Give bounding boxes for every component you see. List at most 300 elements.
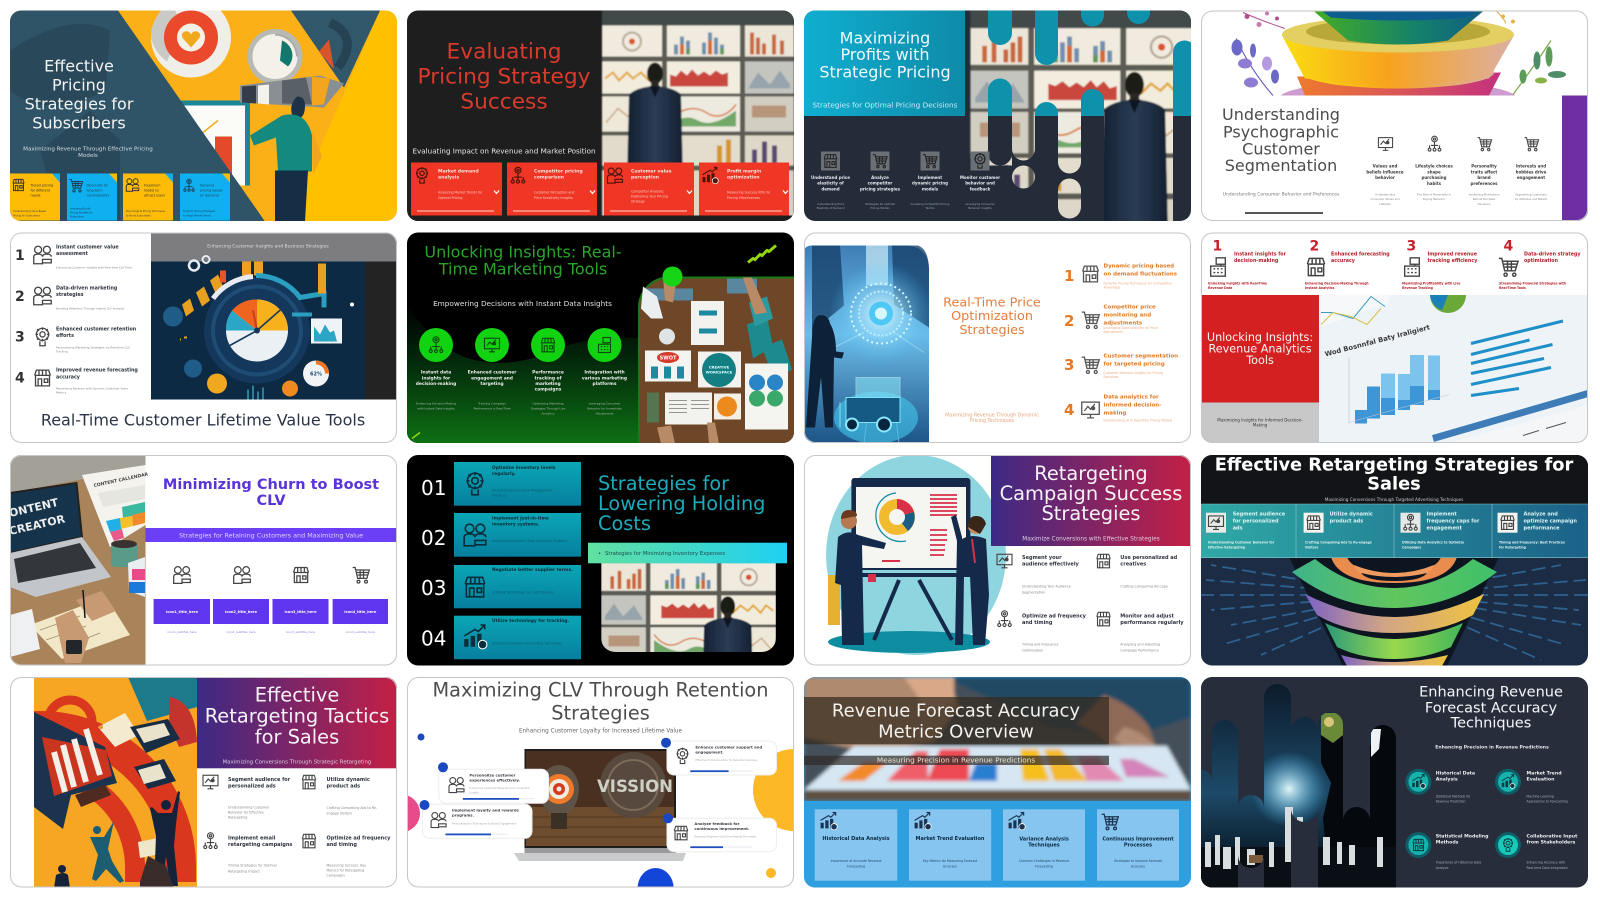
- list item 3: [1064, 354, 1178, 379]
- callout: feedback: [663, 813, 776, 852]
- title band: Campaign Success: [1000, 482, 1182, 505]
- list item 4: Implementing AI in Real-Time Pricing Models: [1104, 418, 1173, 422]
- item: personalized creatives: creatives: [1120, 562, 1146, 568]
- item: analyze performance: [1498, 512, 1577, 550]
- item: market trend: Approaches to Forecasting: [1526, 800, 1568, 804]
- list item 2: Adjustments: [1104, 330, 1123, 334]
- item: historical data: Historical Data: [1436, 770, 1475, 776]
- step 01: Optimize inventory levels: [492, 465, 556, 471]
- title box: Tools: [1245, 354, 1274, 367]
- item: segment audience: ads: [1233, 525, 1243, 531]
- item: lifestyle choices: shape: [1427, 170, 1441, 174]
- item: frequency caps: frequency caps for: [1426, 518, 1480, 524]
- list item 1: [1208, 238, 1287, 290]
- item: ad frequency: Optimize ad frequency: [326, 835, 391, 841]
- card: continuous improvement: Accuracy: [1131, 864, 1145, 868]
- item: integration: [582, 328, 627, 416]
- item: ad frequency: [302, 834, 391, 878]
- title: Optimization: [951, 309, 1033, 324]
- list item 4: making: [1104, 410, 1126, 416]
- item: interests and hobbies: Segmenting Customers: [1515, 192, 1547, 196]
- panel: Revenue Forecast Accuracy Metrics Overview: [804, 677, 1191, 888]
- item: dynamic ads: [302, 775, 378, 815]
- illustration: telescope: [240, 76, 344, 108]
- card: tiered pricing: Pricing for Subscribers: [13, 214, 41, 218]
- list item 2: adjustments: [1104, 320, 1143, 326]
- item: frequency caps: [1400, 512, 1480, 550]
- title: Segmentation: [1225, 156, 1337, 175]
- card: market demand: Optimal Pricing: [438, 196, 462, 200]
- list item 3: tracking efficiency: [1428, 258, 1478, 264]
- photo: workspace table: WORKSPACE: [706, 370, 733, 374]
- list item 3: Improved revenue: [1428, 252, 1478, 258]
- item: instant data insights: Instant data: [421, 370, 451, 376]
- panel: Minimizing Churn to Boost CLV: [8, 455, 397, 666]
- photo: hands over colourful chart: [804, 677, 1191, 801]
- title band: Revenue Forecast Accuracy: [832, 701, 1080, 722]
- icon: zigzag accent: [748, 246, 776, 262]
- item: segment audience: Effective Retargeting: [1208, 546, 1245, 550]
- callout: feedback: Analyze feedback for: [694, 821, 740, 826]
- item: implement dynamic pricing: dynamic pricing: [912, 180, 948, 186]
- list item 3: Customer segmentation: [1104, 354, 1178, 360]
- item: monitor performance: [1097, 612, 1184, 653]
- title box: Revenue Analytics: [1208, 342, 1312, 356]
- list item 2: accuracy: [1331, 258, 1356, 264]
- list item 1: [15, 244, 132, 270]
- photo: chart wall with man: [969, 10, 1191, 221]
- card: tiered pricing: Tiered pricing: [30, 184, 53, 188]
- card: profit margin: Measuring Success KPIs for: [727, 190, 771, 194]
- item: values and beliefs: behavior: [1375, 175, 1395, 180]
- list item 4: 4: [1064, 401, 1074, 419]
- item: segment: Understanding Your Audience: [1022, 585, 1071, 589]
- callout: customer support: [661, 738, 776, 775]
- item: segment audience: Segment audience: [1233, 512, 1286, 518]
- item: values and beliefs: Understanding: [1375, 192, 1395, 196]
- card: competitor pricing: Competitor pricing: [534, 168, 583, 174]
- card: customer value: Customer value: [631, 168, 672, 174]
- item: analyze competitor pricing: competitor: [868, 180, 892, 186]
- item: understand price elasticity: demand: [821, 186, 840, 192]
- item: implement dynamic pricing: [911, 152, 950, 210]
- title band: [804, 697, 1109, 744]
- item: interests and hobbies: [1515, 138, 1548, 201]
- item: integration: various marketing: [582, 376, 627, 382]
- item: understand price elasticity: elasticity of: [817, 180, 844, 186]
- subtitle: Empowering Decisions with Instant Data Insights: [433, 299, 612, 308]
- item: values and beliefs: [1366, 138, 1404, 206]
- list item 3: efforts: [56, 333, 74, 339]
- item 1: icon1_subtitle_here: [167, 630, 197, 634]
- item: segment audience: Behavior for Effective: [228, 810, 264, 814]
- list item 3: Customer Behavior Insights for Pricing: [1104, 371, 1163, 375]
- card: continuous improvement: Continuous Improvement: [1102, 837, 1174, 843]
- card: market trend: Market Trend Evaluation: [916, 836, 985, 842]
- list item 2: 2: [15, 289, 25, 305]
- list item 2: Boosting Retention Through Instant CLV Analysis: [56, 306, 125, 310]
- illustration: laptop with vision sign: [514, 749, 686, 861]
- item: monitor customer behavior: Behavior Insights: [968, 206, 992, 210]
- item: segment audience: for personalized: [1233, 518, 1279, 524]
- panel: Retargeting Campaign Success Strategies: [804, 455, 1191, 666]
- title band: Retargeting: [1034, 462, 1148, 485]
- list item 2: [15, 286, 125, 310]
- item 4: icon4_subtitle_here: [346, 630, 375, 634]
- item: integration: Integration with: [584, 370, 625, 376]
- subtitle band: Measuring Precision in Revenue Predictions: [877, 756, 1035, 765]
- item: implement dynamic pricing: Tactics: [924, 206, 935, 210]
- card: discounts: commitments: [86, 194, 110, 198]
- panel: Real-Time Price Optimization Strategies: [804, 232, 1191, 444]
- item: personalized creatives: Use personalized ad: [1120, 555, 1178, 561]
- title: Strategic Pricing: [819, 62, 951, 82]
- item: segment: [997, 554, 1080, 594]
- step 03: Negotiate better supplier terms.: [492, 567, 573, 573]
- background green wave: [407, 304, 647, 444]
- item: instant data insights: with Instant Data Insights: [417, 406, 455, 410]
- card: dynamic pricing: pricing based: [200, 188, 222, 192]
- callout: customer support: Effective Communication for Retention Success: [695, 758, 758, 762]
- item: market trend: Evaluation: [1526, 776, 1554, 782]
- item: personality traits: preferences: [1470, 181, 1498, 186]
- panel: Effective Retargeting Tactics for Sales: [0, 677, 397, 888]
- list item 1: Dynamic pricing based: [1104, 264, 1174, 270]
- item: dynamic product ads: Utilize dynamic: [1330, 512, 1373, 518]
- card: market demand: Analyzing Market Trends for: [438, 190, 483, 194]
- item: statistical modeling: Statistical Modeling: [1436, 833, 1488, 839]
- item: collaborative input: Enhancing Accuracy with: [1526, 861, 1565, 865]
- illustration: presentation board: [178, 100, 250, 186]
- step 04: [421, 616, 581, 659]
- list item 4: [1064, 394, 1173, 422]
- list item 1: [1064, 264, 1178, 290]
- item: performance tracking: Optimizing Marketing: [533, 402, 564, 406]
- list item 4: [1499, 238, 1581, 290]
- item: frequency caps: Campaigns: [1402, 546, 1421, 550]
- item: collaborative input: from Stakeholders: [1526, 839, 1576, 845]
- item: email retargeting: Retargeting Impact: [228, 870, 260, 874]
- item: collaborative input: [1495, 832, 1578, 870]
- illustration: layered funnel: [1280, 12, 1516, 96]
- list item 3: Tracking: [55, 350, 68, 354]
- step 03: Utilizing Technology for Cost Tracking: [492, 590, 554, 594]
- item: implement dynamic pricing: models: [922, 186, 939, 192]
- item: frequency caps: Implement: [1426, 512, 1457, 518]
- callout: loyalty programs: Implement loyalty and rewards: [452, 808, 520, 813]
- item: integration: platforms: [592, 381, 617, 387]
- card: market demand: [411, 162, 502, 216]
- list item 3: 3: [1064, 356, 1074, 374]
- list item 3: Decisions: [1104, 375, 1119, 379]
- list item 2: Competitor price: [1104, 304, 1156, 310]
- item: lifestyle choices: habits: [1427, 181, 1442, 186]
- card: historical data: Historical Data Analysis: [822, 836, 890, 842]
- item: analyze competitor pricing: Analyze: [871, 175, 889, 180]
- list item 2: Leveraging Data Analytics for Price: [1104, 326, 1158, 330]
- list item 1: Advantage: [1104, 286, 1120, 290]
- item: monitor performance: Analyzing and Adjusting: [1120, 643, 1160, 647]
- photo: content creator desk: CONTENT CALLENDAR: [93, 471, 149, 489]
- item: analyze performance: optimize campaign: [1524, 518, 1577, 524]
- card: variance analysis: [1003, 809, 1085, 881]
- chart: analytics report photo: [1319, 294, 1588, 444]
- list item 3: Personalizing Marketing Strategies via Real-time CLV: [56, 346, 130, 350]
- item: performance tracking: campaigns: [535, 386, 562, 392]
- item: dynamic product ads: Visitors: [1305, 546, 1318, 550]
- title: Real-Time Customer Lifetime Value Tools: [41, 410, 365, 430]
- list item 1: Enhancing Customer Insights with Real-time CLV Tools: [56, 266, 132, 270]
- card: historical data: [815, 809, 897, 881]
- panel: Maximizing Profits with Strategic Pricing: [804, 10, 1191, 221]
- card: freemium: model to: [144, 188, 159, 192]
- callout: personalize: Enhancing Customer Experience for Long-Term: [469, 786, 531, 790]
- item: ad frequency: and timing: [326, 842, 357, 848]
- item 4: icon4_title_here: [344, 610, 377, 614]
- item: lifestyle choices: [1415, 136, 1453, 201]
- subtitle strip: •: [598, 551, 601, 557]
- title band: Maximizing Conversions Through Strategic Retargeting: [223, 759, 371, 765]
- list item 1: Revenue Data: [1208, 286, 1232, 290]
- item: ad frequency: Measuring Success: Key: [326, 864, 366, 868]
- item: analyze performance: Timing and Frequency: Best Practices: [1499, 541, 1565, 545]
- item: email retargeting: retargeting campaigns: [228, 842, 292, 848]
- card: dynamic pricing: to Adapt Market Trends: [183, 214, 211, 218]
- decorative teal and dark pills: [988, 0, 1196, 166]
- chart: analytics report photo: Wod Bosnnfal Baty Iraligiert: [1324, 323, 1432, 358]
- title band: Metrics Overview: [878, 721, 1034, 742]
- item: dynamic product ads: [1304, 512, 1373, 550]
- header band: Enhancing Customer Insights and Business Strategies: [207, 244, 329, 250]
- list item 3: [15, 326, 137, 354]
- title: Profits with: [840, 45, 930, 64]
- list item 1: Dynamic Pricing Techniques for Competitive: [1104, 282, 1172, 286]
- subtitle: Maximizing Revenue Through Effective Pricing: [23, 146, 153, 152]
- item: instant data insights: decision-making: [416, 381, 456, 387]
- list item 3: 3: [15, 330, 25, 346]
- card: customer value: Positioning Your Pricing: [631, 194, 668, 198]
- title band: Strategies: [1041, 502, 1141, 525]
- photo: workspace table: SWOT: [660, 356, 677, 362]
- step 03: 03: [421, 576, 446, 600]
- list item 3: [1402, 238, 1478, 290]
- item: enhanced engagement: Enhanced customer: [468, 370, 517, 376]
- subtitle box: Making: [1253, 422, 1268, 428]
- item: enhanced engagement: Tracking Campaign: [477, 402, 506, 406]
- item: ad frequency: [998, 611, 1087, 653]
- item: monitor performance: Monitor and adjust: [1120, 613, 1174, 619]
- item: statistical modeling: [1405, 832, 1488, 870]
- list item 4: 4: [1504, 238, 1514, 254]
- title: Maximizing CLV Through Retention: [433, 679, 768, 702]
- item: values and beliefs: Lifestyle: [1379, 202, 1391, 206]
- photo: content creator desk: CREATOR: [8, 512, 67, 538]
- card: market trend: Key Metrics for Measuring Forecast: [923, 859, 978, 863]
- item: ad frequency: Metrics for Retargeting: [326, 869, 364, 873]
- title: Effective: [44, 56, 114, 76]
- item 1: [154, 567, 210, 634]
- item: dynamic product ads: Crafting Compelling Ads to Re-engage: [1305, 541, 1372, 545]
- item: ad frequency: Timing and Frequency: [1021, 643, 1059, 647]
- item: collaborative input: Real-time Data Integration: [1526, 866, 1568, 870]
- card: discounts: Discounts for: [86, 184, 109, 188]
- item: interests and hobbies: by Attitudes and Beliefs: [1515, 197, 1548, 201]
- title: Customer: [1242, 140, 1320, 158]
- subtitle: Understanding Consumer Behavior and Preferences: [1223, 192, 1340, 198]
- photo: workspace table: CREATIVE: [709, 364, 730, 370]
- list item 2: 2: [1310, 238, 1319, 254]
- step 03: [421, 565, 581, 608]
- list item 3: Maximizing Profitability with Live: [1402, 282, 1460, 286]
- card: customer value: perception: [631, 174, 659, 180]
- icon: green dot: [662, 266, 682, 286]
- item: enhanced engagement: Performance in Real-Time: [474, 406, 511, 410]
- callout: loyalty programs: Personalization Techniques to Boost Engagement: [452, 821, 516, 825]
- card: market trend: Accuracy: [943, 864, 957, 868]
- step 01: 01: [421, 476, 446, 500]
- list item 3: Enhanced customer retention: [56, 326, 137, 332]
- item: values and beliefs: Values and: [1373, 164, 1397, 168]
- item: implement dynamic pricing: Analyzing Competitor Pricing: [911, 202, 950, 206]
- panel: Enhancing Revenue Forecast Accuracy Techniques: [1201, 677, 1588, 888]
- title: Strategies for: [25, 94, 134, 114]
- card: discounts: Pricing Benefits for: [70, 212, 93, 214]
- subtitle band: Strategies for Retaining Customers and Maximizing Value: [179, 532, 363, 540]
- title: Psychographic: [1223, 122, 1339, 142]
- subtitle band: [146, 528, 397, 542]
- item: email retargeting: Implement email: [228, 835, 276, 841]
- list item 1: Instant customer value: [56, 244, 119, 250]
- list item 1: 1: [1064, 267, 1074, 285]
- item: lifestyle choices: purchasing: [1421, 175, 1447, 180]
- title: Forecast Accuracy: [1425, 700, 1557, 716]
- list item 2: Instant Analytics: [1305, 286, 1335, 290]
- item: understand price elasticity: [811, 152, 850, 210]
- item: segment: Segment your: [1022, 555, 1062, 561]
- list item 3: Revenue Tracking: [1402, 286, 1433, 290]
- item: segment audience: Understanding Customer Behavior for: [1208, 541, 1275, 545]
- card: discounts: long-term: [86, 188, 103, 192]
- item: performance tracking: Analytics: [541, 412, 555, 416]
- title: Evaluating: [447, 40, 561, 64]
- item: lifestyle choices: Buying Behavior: [1423, 197, 1446, 201]
- panel: Unlocking Insights Real-Time Marketing Tools: [407, 232, 797, 448]
- card: tiered pricing: for different: [30, 188, 51, 192]
- item: statistical modeling: Analysis: [1436, 866, 1449, 870]
- item: ad frequency: Optimization: [1022, 649, 1043, 653]
- card: tiered pricing: Understanding Value-Based: [13, 210, 47, 213]
- subtitle: Pricing Techniques: [970, 418, 1015, 424]
- title: Subscribers: [32, 114, 126, 132]
- title band: [197, 677, 397, 768]
- item: segment audience: Understanding Customer: [228, 805, 270, 809]
- photo: city skyline through pill cutouts: [1201, 677, 1396, 888]
- card: dynamic pricing: [180, 174, 230, 220]
- item: personality traits: Personality: [1471, 164, 1497, 168]
- title: Costs: [598, 512, 651, 535]
- card: freemium: Freemium: [144, 184, 160, 188]
- item: lifestyle choices: The Role of Personality in: [1416, 192, 1451, 196]
- panel: Maximizing CLV Through Retention Strategies: [382, 677, 835, 888]
- item: instant data insights: Enhancing Decision-Making: [416, 402, 456, 406]
- step 01: Streamlining Inventory Management: [492, 488, 553, 492]
- title box: Unlocking Insights:: [1207, 331, 1313, 344]
- item: performance tracking: tracking of: [535, 376, 562, 382]
- item: interests and hobbies: engagement: [1517, 175, 1545, 180]
- card: profit margin: Profit margin: [727, 168, 761, 174]
- item: analyze performance: performance: [1524, 525, 1560, 531]
- callout: personalize: [438, 762, 548, 803]
- title: Understanding: [1222, 105, 1340, 124]
- card: historical data: Importance of Accurate Revenue: [831, 859, 882, 863]
- item: dynamic ads: product ads: [326, 784, 360, 790]
- card: competitor pricing: comparison: [534, 174, 564, 180]
- item: monitor customer behavior: Leveraging Consumer: [965, 202, 996, 206]
- illustration: megaphone and crowd: [0, 677, 197, 888]
- item: historical data: Analysis: [1436, 776, 1458, 782]
- item: segment audience: Retargeting: [228, 815, 247, 819]
- item: understand price elasticity: Understand price: [811, 175, 850, 180]
- list item 4: Maximizing Revenue with Dynamic Customer Value: [56, 386, 128, 390]
- step 01: [421, 462, 581, 506]
- item: integration: Adjustments: [595, 412, 614, 416]
- subtitle: Enhancing Precision in Revenue Predictions: [1435, 744, 1549, 750]
- item: performance tracking: Performance: [532, 370, 564, 376]
- title box: [1201, 295, 1319, 402]
- card: continuous improvement: Strategies to Improve Forecast: [1114, 859, 1163, 863]
- subtitle: Strategies for Optimal Pricing Decisions: [813, 100, 958, 110]
- subtitle box: [1201, 402, 1319, 444]
- card: variance analysis: Variance Analysis: [1019, 837, 1069, 843]
- list item 2: Data-driven marketing: [56, 286, 118, 292]
- item 2: icon2_subtitle_here: [226, 630, 256, 634]
- subtitle box: Maximizing Insights for Informed Decision-: [1217, 418, 1303, 422]
- item: dynamic ads: Utilize dynamic: [326, 777, 370, 783]
- list item 1: 1: [1212, 238, 1222, 254]
- header: [1201, 455, 1588, 504]
- item: personalized creatives: Crafting Compelling Ad Copy: [1120, 585, 1168, 589]
- panel: Evaluating Pricing Strategy Success: [407, 10, 794, 222]
- callout: personalize: Loyalty: [469, 790, 479, 794]
- list item 4: optimization: [1524, 258, 1559, 264]
- item: personality traits: [1469, 138, 1500, 206]
- item: integration: Behavior for Immediate: [587, 406, 622, 410]
- header: Effective Retargeting Strategies for: [1215, 455, 1574, 476]
- item: interests and hobbies: hobbies drive: [1516, 170, 1547, 174]
- card: competitor pricing: Price Sensitivity Insights: [534, 196, 573, 200]
- item: enhanced engagement: [468, 328, 517, 410]
- card: tiered pricing: [10, 174, 60, 220]
- item: segment audience: [203, 775, 291, 819]
- item: analyze competitor pricing: Strategies for Optimal: [865, 202, 895, 206]
- photo: man facing chart wall: [601, 549, 776, 741]
- list item 2: Enhancing Decision-Making Through: [1305, 282, 1369, 286]
- list item 4: Improved revenue forecasting: [56, 368, 138, 374]
- card: customer value: [604, 162, 694, 216]
- item: performance tracking: marketing: [535, 381, 561, 387]
- title: Pricing Strategy: [418, 64, 591, 90]
- title: Minimizing Churn to Boost: [163, 477, 379, 493]
- item: frequency caps: engagement: [1426, 525, 1463, 531]
- card: continuous improvement: [1097, 809, 1179, 881]
- item 3: [272, 568, 328, 634]
- item: enhanced engagement: engagement and: [471, 376, 513, 382]
- list item 4: Metrics: [56, 390, 67, 394]
- title: Real-Time Price: [943, 296, 1041, 310]
- item: implement dynamic pricing: Implement: [918, 175, 942, 180]
- list item 4: Streamlining Financial Strategies with: [1499, 282, 1566, 286]
- title: Strategies: [551, 701, 650, 724]
